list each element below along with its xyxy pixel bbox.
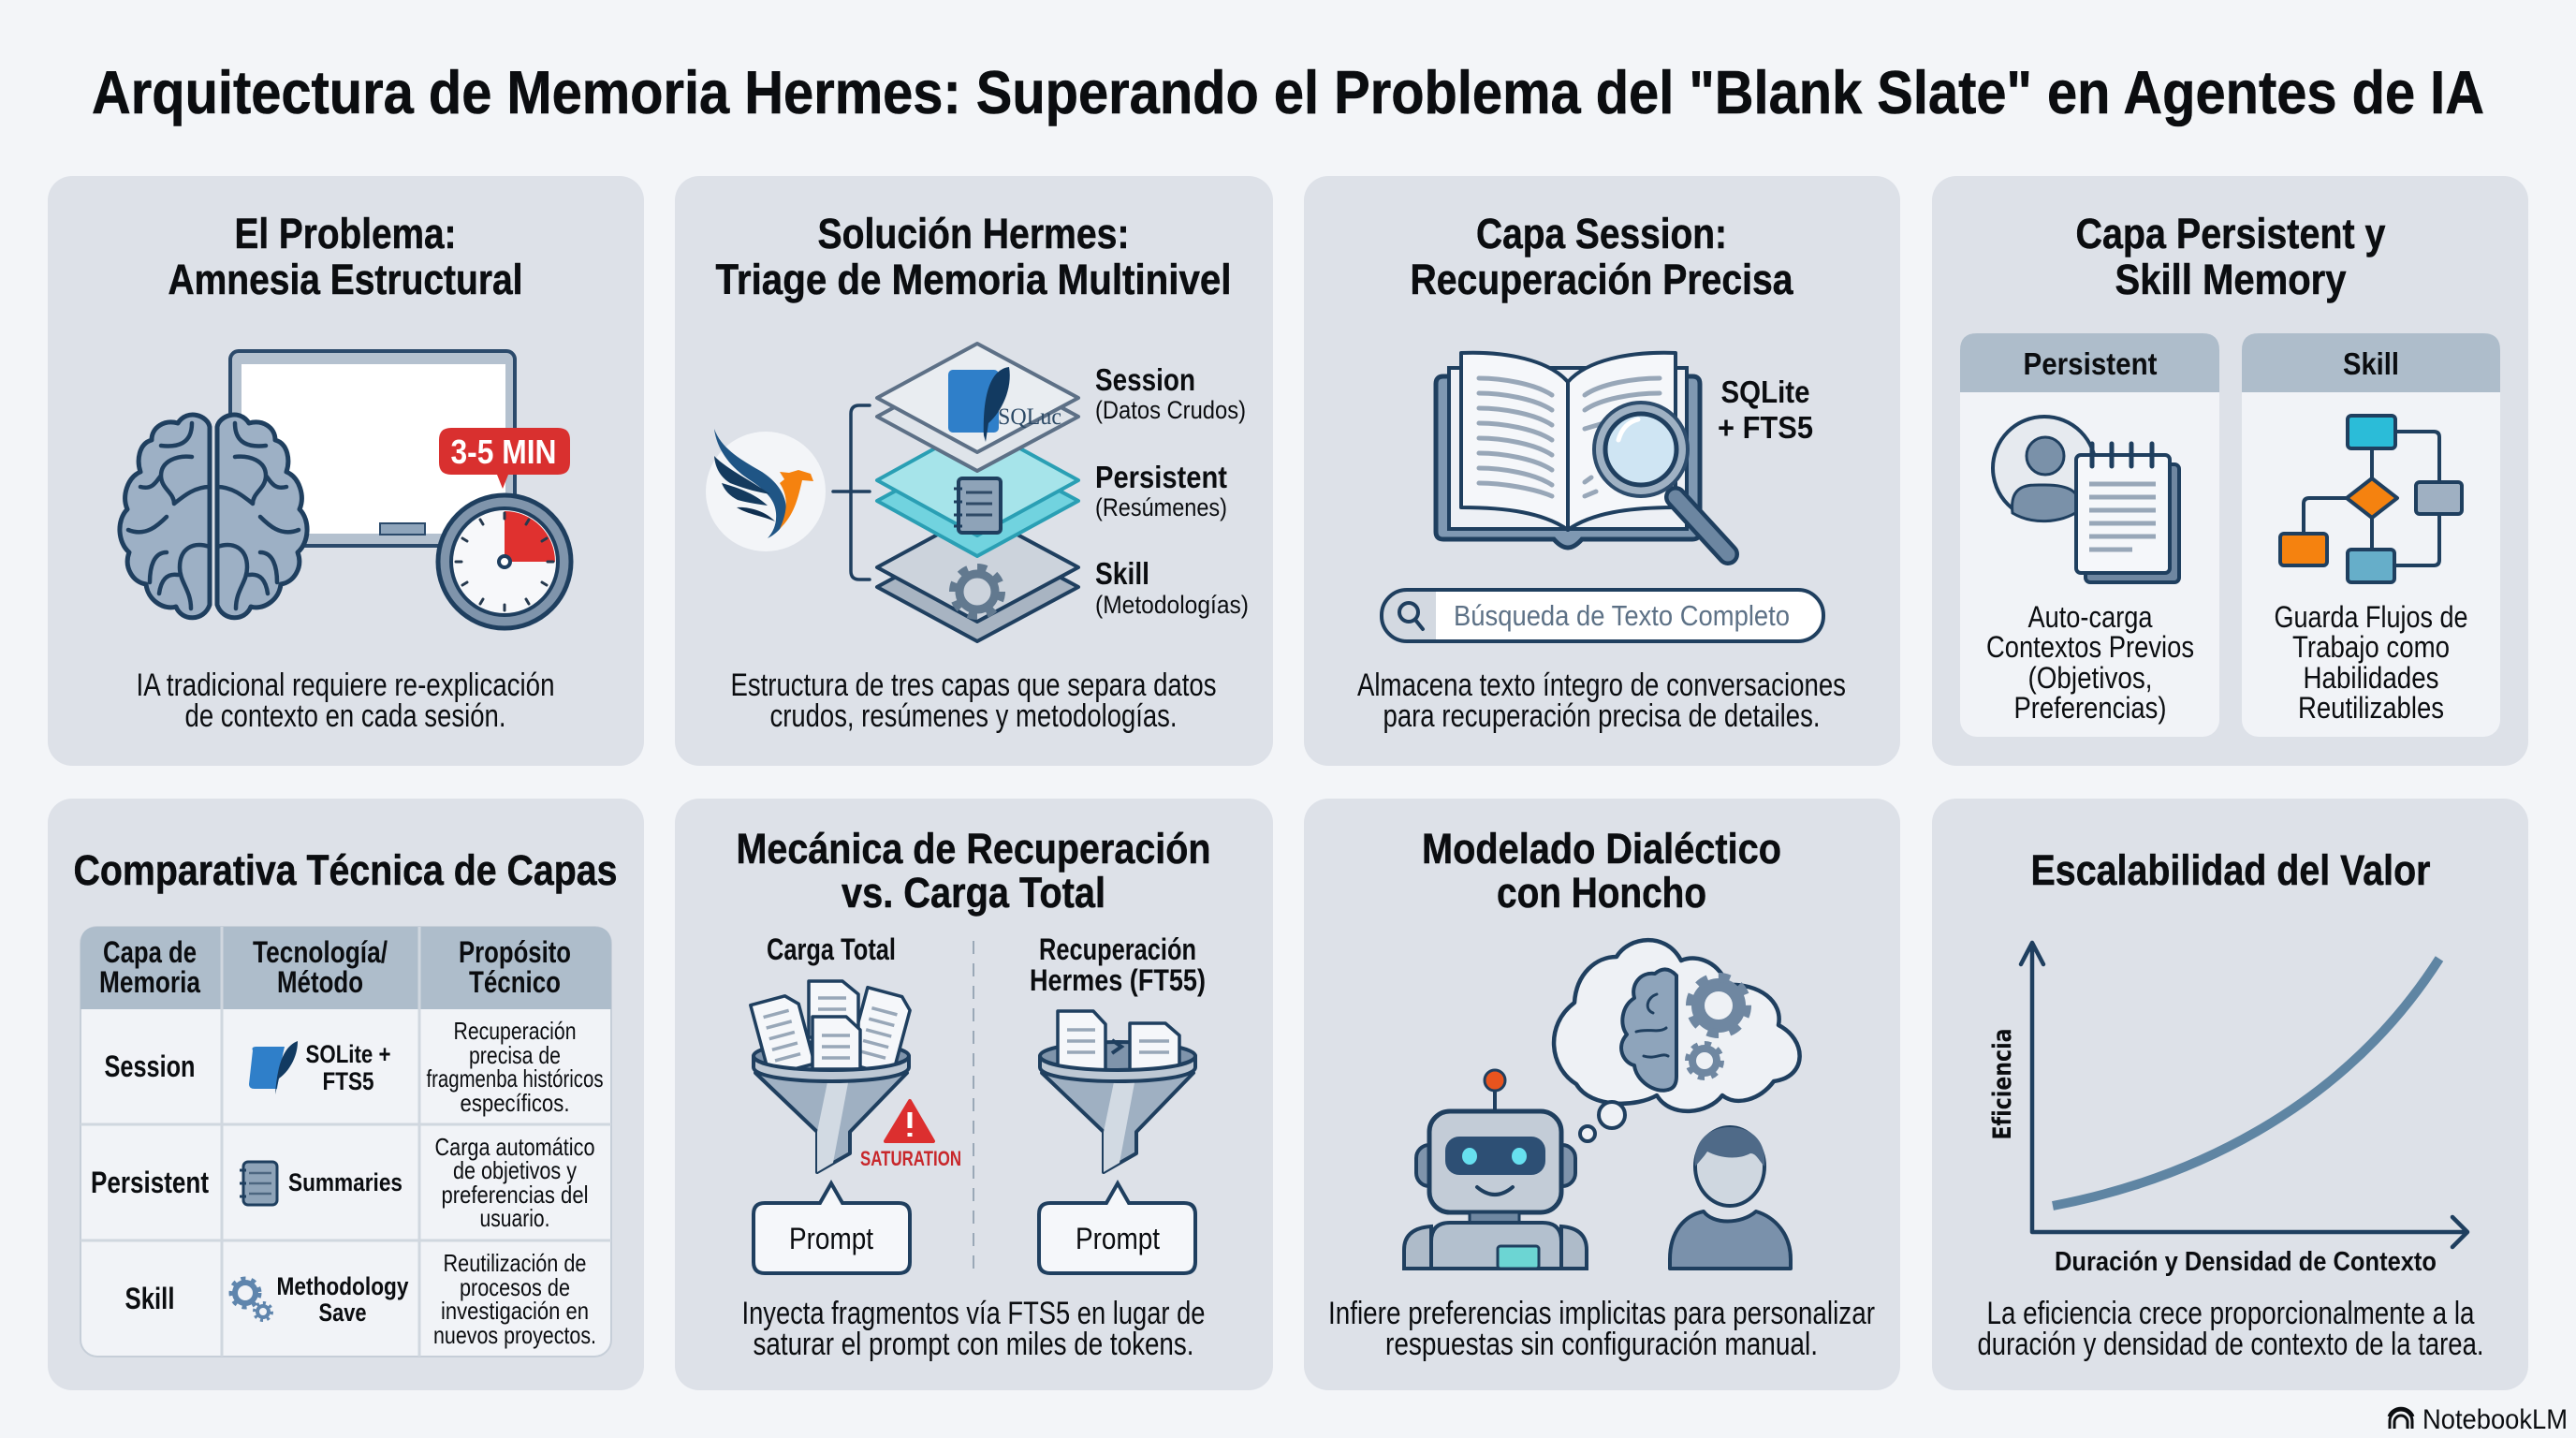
row: session: Recuperación — [453, 1017, 577, 1045]
row: session: precisa de — [469, 1041, 561, 1069]
card: persistent: Preferencias) — [2014, 691, 2166, 725]
icon: stopwatch — [438, 495, 571, 628]
prompt box left: Prompt — [789, 1222, 873, 1255]
search bar — [1382, 590, 1823, 641]
heading: solución hermes: Solución Hermes: — [818, 210, 1129, 257]
layers: session — [877, 344, 1078, 471]
row: session: Session — [105, 1049, 195, 1083]
row: session: FTS5 — [322, 1067, 374, 1095]
caption: Infiere preferencias implicitas para personalizar — [1328, 1296, 1875, 1331]
caption: Estructura de tres capas que separa datos — [730, 668, 1217, 703]
row: persistent: Carga automático — [434, 1133, 595, 1161]
layer labels — [1095, 362, 1249, 619]
row: session: SOLite + — [305, 1040, 391, 1068]
heading: el problema: Amnesia Estructural — [168, 256, 522, 303]
row: skill: Methodology — [277, 1272, 408, 1300]
table header: Capa de — [103, 935, 197, 969]
heading: comparativa técnica: Comparativa Técnica de Capas — [73, 846, 618, 894]
heading: modelado dialéctico: Modelado Dialéctico — [1422, 825, 1781, 873]
icon: robot — [1404, 1070, 1587, 1269]
table header: Memoria — [99, 965, 200, 999]
heading: escalabilidad: Escalabilidad del Valor — [2031, 846, 2430, 894]
callout: 3-5 MIN — [439, 428, 570, 489]
panel: persistent y skill — [1932, 176, 2528, 766]
row: skill: nuevos proyectos. — [433, 1321, 596, 1349]
row: skill: Save — [318, 1299, 367, 1327]
layer labels: Persistent — [1095, 460, 1227, 494]
icon: hermes logo — [706, 429, 826, 551]
callout: 3-5 MIN: 3-5 MIN — [451, 433, 556, 471]
caption: IA tradicional requiere re-explicación — [137, 668, 554, 703]
heading: mecánica — [736, 825, 1211, 917]
icon: saturation warning — [860, 1101, 961, 1170]
heading: mecánica: Mecánica de Recuperación — [736, 825, 1211, 873]
layer labels: Session — [1095, 362, 1195, 397]
row: persistent: Persistent — [91, 1166, 209, 1199]
card: skill — [2242, 333, 2500, 737]
heading: capa session — [1410, 210, 1793, 303]
heading: el problema: El Problema: — [234, 210, 457, 257]
subheads: Recuperación — [1039, 932, 1196, 966]
card: skill: Reutilizables — [2298, 691, 2444, 725]
layer labels: (Datos Crudos) — [1095, 396, 1246, 424]
subheads: Hermes (FT55) — [1030, 963, 1206, 997]
caption: respuestas sin configuración manual. — [1385, 1327, 1818, 1362]
caption — [741, 1296, 1206, 1362]
search bar: Búsqueda de Texto Completo — [1454, 599, 1790, 632]
card: persistent: Auto-carga — [2027, 600, 2153, 634]
layer labels: Skill — [1095, 556, 1149, 591]
prompt box left — [754, 1183, 910, 1273]
heading: solución hermes — [715, 210, 1232, 303]
label: SQLite + FTS5 — [1718, 374, 1813, 445]
table header: Propósito — [459, 935, 571, 969]
row: skill: Reutilización de — [444, 1249, 586, 1277]
row: persistent: usuario. — [479, 1204, 550, 1232]
card: skill: Trabajo como — [2292, 630, 2450, 664]
layers: session: SQLuc — [998, 404, 1061, 430]
subheads: Carga Total — [767, 932, 896, 966]
caption: Almacena texto íntegro de conversaciones — [1357, 668, 1846, 703]
caption — [1357, 668, 1846, 734]
caption — [1977, 1296, 2484, 1362]
caption: Inyecta fragmentos vía FTS5 en lugar de — [741, 1296, 1206, 1331]
heading: capa session: Recuperación Precisa — [1410, 256, 1793, 303]
panel: mecánica de recuperación — [675, 799, 1273, 1390]
row: skill: procesos de — [460, 1273, 570, 1301]
caption — [1328, 1296, 1875, 1362]
icon: funnel overloaded — [751, 981, 913, 1172]
card: skill: Skill — [2343, 346, 2399, 381]
heading: solución hermes: Triage de Memoria Multinivel — [715, 256, 1232, 303]
label: SQLite + FTS5: SQLite — [1720, 374, 1810, 409]
card: skill: Guarda Flujos de — [2275, 600, 2467, 634]
icon: book with magnifier — [1436, 353, 1728, 554]
caption: de contexto en cada sesión. — [185, 698, 505, 734]
heading: modelado dialéctico: con Honcho — [1497, 869, 1706, 917]
caption — [730, 668, 1217, 734]
prompt box right: Prompt — [1076, 1222, 1160, 1255]
row: session: específicos. — [461, 1089, 569, 1117]
label: SQLite + FTS5: + FTS5 — [1718, 410, 1813, 445]
card: persistent: (Objetivos, — [2027, 661, 2153, 695]
axis label: x: Duración y Densidad de Contexto — [2055, 1247, 2437, 1277]
card: persistent: Persistent — [2024, 346, 2158, 381]
icon: whiteboard — [230, 351, 515, 546]
heading: mecánica: vs. Carga Total — [842, 869, 1105, 917]
layers: persistent — [877, 425, 1078, 556]
card: skill: Habilidades — [2303, 661, 2439, 695]
panel: modelado dialéctico — [1304, 799, 1900, 1390]
caption: La eficiencia crece proporcionalmente a la — [1986, 1296, 2475, 1331]
caption: crudos, resúmenes y metodologías. — [769, 698, 1178, 734]
panel: capa session — [1304, 176, 1900, 766]
table — [80, 927, 611, 1357]
layer labels: (Resúmenes) — [1095, 493, 1227, 521]
row: persistent: de objetivos y — [453, 1156, 577, 1184]
bracket — [833, 405, 870, 580]
subheads — [767, 932, 1206, 997]
row: skill — [125, 1249, 596, 1349]
row: skill: Skill — [125, 1282, 174, 1315]
caption — [137, 668, 554, 734]
caption: saturar el prompt con miles de tokens. — [753, 1327, 1194, 1362]
icon: thought cloud — [1554, 940, 1800, 1141]
heading: modelado dialéctico — [1422, 825, 1781, 917]
card: persistent: Contextos Previos — [1986, 630, 2194, 664]
row: session: fragmenba históricos — [427, 1064, 603, 1093]
icon: saturation warning: SATURATION — [860, 1147, 961, 1170]
panel: el problema — [48, 176, 644, 766]
panel: escalabilidad — [1932, 799, 2528, 1390]
heading: persistent y skill — [2076, 210, 2385, 303]
card: persistent — [1960, 333, 2219, 737]
line chart — [1988, 943, 2467, 1277]
prompt box right — [1039, 1183, 1195, 1273]
heading: persistent y skill: Skill Memory — [2115, 256, 2346, 303]
panel: comparativa técnica — [48, 799, 644, 1390]
caption: para recuperación precisa de detailes. — [1383, 698, 1820, 734]
layer labels: (Metodologías) — [1095, 591, 1249, 619]
row: persistent: preferencias del — [442, 1181, 588, 1209]
table header: Tecnología/ — [253, 935, 388, 969]
row: persistent: Summaries — [288, 1168, 402, 1196]
table header: Método — [277, 965, 363, 999]
panel: solución hermes — [675, 176, 1273, 766]
icon: brain — [120, 415, 307, 618]
heading: capa session: Capa Session: — [1476, 210, 1727, 257]
heading: persistent y skill: Capa Persistent y — [2076, 210, 2385, 257]
heading: el problema — [168, 210, 522, 303]
row: skill: investigación en — [441, 1297, 589, 1325]
row: session — [105, 1017, 603, 1117]
axis label: y: Eficiencia — [1988, 1028, 2017, 1140]
table header — [99, 935, 571, 999]
icon: workflow — [2280, 416, 2462, 582]
icon: person — [1670, 1127, 1791, 1269]
row: persistent — [91, 1133, 595, 1232]
layers: skill — [877, 513, 1078, 641]
icon: user and notepad — [1993, 417, 2179, 582]
table header: Técnico — [469, 965, 561, 999]
icon: funnel filtered — [1040, 1011, 1195, 1172]
